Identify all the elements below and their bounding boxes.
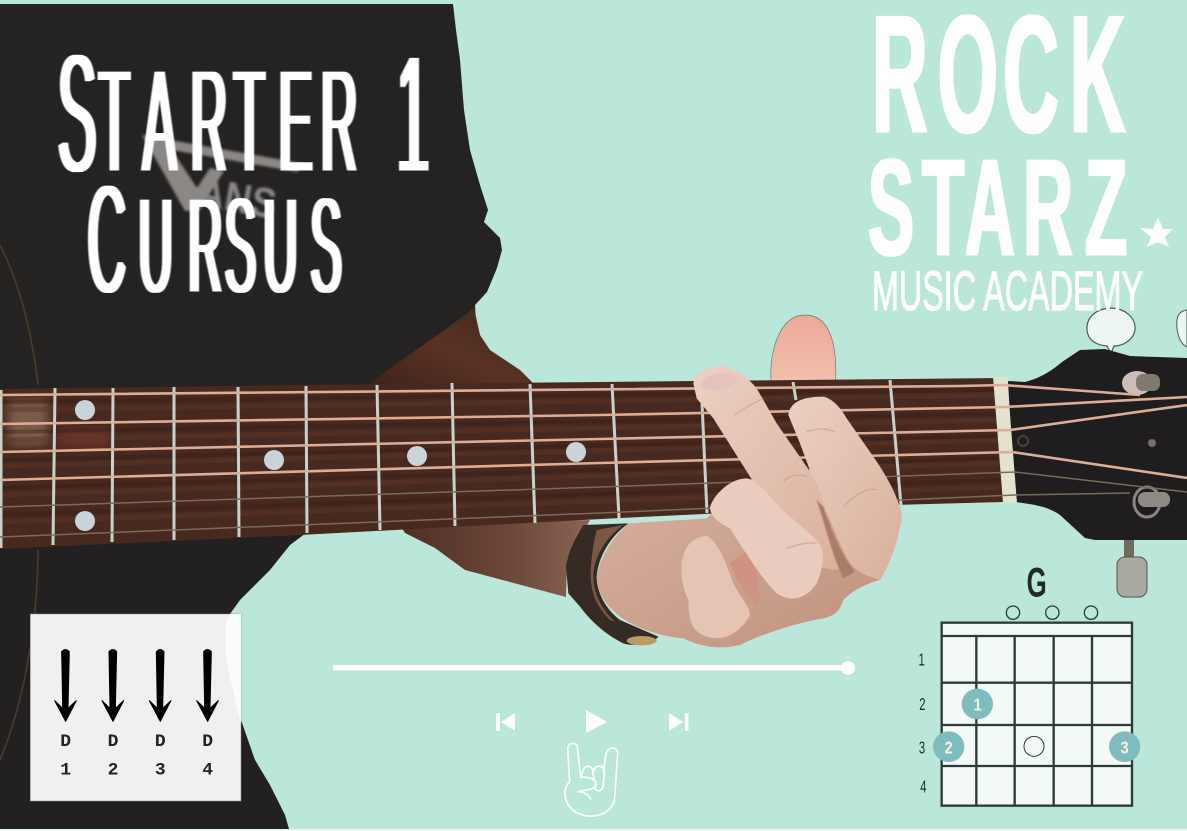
finger 2: 2 bbox=[945, 738, 953, 758]
middle finger bbox=[788, 397, 902, 580]
fret numbers: 2 bbox=[919, 696, 925, 715]
finger 3 bbox=[1109, 731, 1140, 762]
logo: Rock Starz Music Academy bbox=[868, 0, 1173, 322]
frets bbox=[1, 380, 901, 548]
top peg bbox=[1087, 308, 1135, 353]
chord name: G bbox=[1027, 561, 1047, 606]
strum labels D: D bbox=[202, 732, 213, 752]
fret markers bbox=[75, 400, 586, 531]
title line 1: S bbox=[58, 18, 96, 208]
bottom edge strip bbox=[0, 829, 1187, 831]
strumming pattern card bbox=[30, 614, 241, 801]
guitar body edge upper bbox=[0, 245, 38, 385]
logo word STARZ: STARZ bbox=[868, 131, 1127, 285]
finger 2 bbox=[933, 731, 964, 762]
finger creases bbox=[735, 398, 877, 548]
icon: previous bbox=[496, 713, 515, 731]
strum counts bbox=[60, 760, 213, 780]
Vans logo on shirt bbox=[142, 135, 300, 228]
guitar body edge lower bbox=[0, 550, 38, 760]
tuner posts bbox=[1122, 371, 1152, 395]
finger 3: 3 bbox=[1121, 738, 1129, 758]
headstock bbox=[1008, 308, 1187, 597]
Vans logo on shirt: ANS bbox=[194, 169, 280, 228]
strum arrows bbox=[55, 649, 218, 721]
title bbox=[58, 18, 429, 326]
strum labels D bbox=[60, 732, 213, 752]
shirt lower bbox=[0, 520, 320, 829]
index finger bbox=[693, 367, 847, 570]
strum counts: 1 bbox=[60, 760, 71, 780]
upper arm bbox=[360, 308, 535, 392]
chord diagram: G bbox=[919, 561, 1140, 806]
top right peg bbox=[1177, 310, 1187, 347]
finger 1: 1 bbox=[974, 695, 982, 715]
fret numbers: 4 bbox=[920, 778, 926, 797]
hand bbox=[566, 367, 902, 647]
watch bbox=[566, 523, 658, 645]
audio player bbox=[333, 661, 855, 733]
fret numbers bbox=[919, 651, 926, 797]
forearm bbox=[400, 520, 590, 597]
strings bbox=[0, 385, 1187, 537]
title line 1: 1 bbox=[397, 19, 429, 208]
chord grid bbox=[942, 623, 1132, 806]
finger shadow bbox=[817, 500, 855, 578]
strum counts: 2 bbox=[108, 760, 118, 780]
strum labels D: D bbox=[60, 732, 71, 752]
strum counts: 3 bbox=[155, 760, 166, 780]
finger 1 bbox=[962, 689, 993, 719]
icon: rock hand bbox=[565, 743, 618, 816]
icon: next bbox=[669, 713, 688, 731]
palm bbox=[597, 467, 902, 647]
strum labels D: D bbox=[108, 732, 119, 752]
fret numbers: 3 bbox=[919, 739, 925, 758]
headstock body bbox=[1008, 349, 1187, 540]
title line 2: URSUS bbox=[139, 168, 342, 322]
thumb bbox=[771, 315, 836, 382]
strum labels D: D bbox=[155, 732, 166, 752]
icon: star bbox=[1140, 217, 1173, 247]
title line 1: TARTER bbox=[99, 39, 374, 204]
pinky finger bbox=[681, 536, 750, 638]
fret numbers: 1 bbox=[919, 651, 925, 670]
fretboard bbox=[0, 377, 1187, 549]
shirt upper bbox=[0, 4, 502, 400]
title line 2: C bbox=[88, 152, 126, 326]
icon: play bbox=[586, 710, 607, 733]
open string markers bbox=[1006, 606, 1098, 619]
ring finger bbox=[710, 478, 823, 599]
progress bar bbox=[333, 661, 855, 675]
strum counts: 4 bbox=[202, 760, 213, 780]
nut bbox=[993, 377, 1017, 503]
bottom peg bbox=[1124, 538, 1134, 558]
